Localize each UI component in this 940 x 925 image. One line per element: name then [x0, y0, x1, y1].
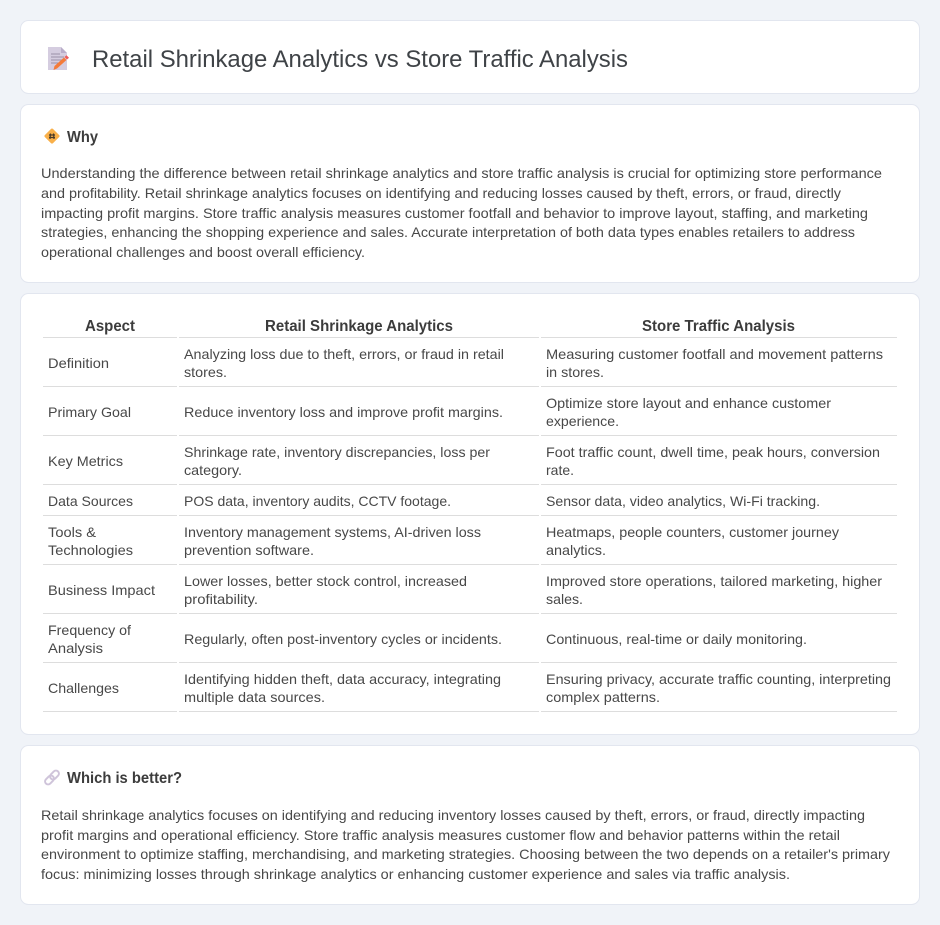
icon: chain link	[44, 769, 60, 786]
table row: primary goal: Primary Goal	[48, 404, 131, 420]
text block: why paragraph: and profitability. Retail shrinkage analytics focuses on identifying and reducing losses caused by theft, errors, or fraud, directly	[41, 185, 841, 201]
table row: frequency of analysis	[43, 622, 897, 663]
table header row: Aspect	[85, 318, 136, 335]
table row: tools and technologies: Technologies	[48, 542, 133, 558]
table header row: Store Traffic Analysis	[642, 318, 795, 335]
table row: tools and technologies: analytics.	[546, 542, 606, 558]
heading: why: Why	[67, 129, 98, 146]
text block: which is better paragraph: Retail shrinkage analytics focuses on identifying and reducing inventory losses caused by theft, errors, or fraud, directly impacting	[41, 807, 865, 823]
table row: challenges: Challenges	[48, 680, 119, 696]
table row: business impact: profitability.	[184, 591, 258, 607]
table row: business impact	[43, 573, 897, 614]
table row: key metrics: rate.	[546, 462, 574, 478]
table row: tools and technologies	[43, 524, 897, 565]
table row: data sources: Data Sources	[48, 493, 133, 509]
table row: primary goal: Optimize store layout and enhance customer	[546, 395, 831, 411]
table row: primary goal: Reduce inventory loss and improve profit margins.	[184, 404, 503, 420]
table row: tools and technologies: Heatmaps, people counters, customer journey	[546, 524, 839, 540]
table row: data sources	[43, 493, 897, 516]
table row: key metrics: Shrinkage rate, inventory discrepancies, loss per	[184, 444, 490, 460]
table row: key metrics: category.	[184, 462, 242, 478]
text block: why paragraph: strategies, enhancing the shopping experience and sales. Accurate interpretation of both data types enables retailers to address	[41, 224, 855, 240]
table row: data sources: Sensor data, video analytics, Wi-Fi tracking.	[546, 493, 820, 509]
panel: comparison table	[20, 294, 920, 734]
panel: why	[20, 104, 920, 282]
table row: business impact: Lower losses, better stock control, increased	[184, 573, 467, 589]
text block: why paragraph	[41, 165, 882, 260]
table row: definition	[43, 346, 897, 387]
icon: document with pencil	[48, 47, 69, 70]
table header row	[43, 318, 897, 338]
table row: tools and technologies: Inventory management systems, AI-driven loss	[184, 524, 481, 540]
table row: key metrics: Key Metrics	[48, 453, 123, 469]
table row: business impact: sales.	[546, 591, 583, 607]
table row: definition: Measuring customer footfall and movement patterns	[546, 346, 883, 362]
text block: which is better paragraph: profit margins and operational efficiency. Store traffic analysis measures customer flow and behavior patterns within the retail	[41, 827, 840, 843]
table row: definition: Definition	[48, 355, 109, 371]
table row: tools and technologies: prevention software.	[184, 542, 314, 558]
table row: challenges	[43, 671, 897, 712]
table row: challenges: complex patterns.	[546, 689, 660, 705]
table row: business impact: Business Impact	[48, 582, 155, 598]
table row: definition: stores.	[184, 364, 227, 380]
table row: challenges: Ensuring privacy, accurate traffic counting, interpreting	[546, 671, 891, 687]
table row: primary goal	[43, 395, 897, 436]
table header row: Retail Shrinkage Analytics	[265, 318, 453, 335]
text block: why paragraph: Understanding the difference between retail shrinkage analytics and store traffic analysis is crucial for optimizing store performance	[41, 165, 882, 181]
table row: challenges: multiple data sources.	[184, 689, 325, 705]
table row: frequency of analysis: Frequency of	[48, 622, 131, 638]
table row: challenges: Identifying hidden theft, data accuracy, integrating	[184, 671, 501, 687]
table row: key metrics	[43, 444, 897, 485]
text block: why paragraph: operational challenges and boost overall efficiency.	[41, 244, 365, 260]
table row: key metrics: Foot traffic count, dwell time, peak hours, conversion	[546, 444, 880, 460]
table row: frequency of analysis: Analysis	[48, 640, 103, 656]
table row: frequency of analysis: Continuous, real-time or daily monitoring.	[546, 631, 807, 647]
text block: which is better paragraph	[41, 807, 890, 882]
table row: frequency of analysis: Regularly, often post-inventory cycles or incidents.	[184, 631, 502, 647]
icon: warning diamond	[44, 128, 60, 144]
table row: definition: in stores.	[546, 364, 604, 380]
table row: definition: Analyzing loss due to theft, errors, or fraud in retail	[184, 346, 504, 362]
panel: which is better	[20, 746, 920, 904]
table row: business impact: Improved store operations, tailored marketing, higher	[546, 573, 882, 589]
heading: which is better: Which is better?	[67, 770, 182, 787]
panel: header	[20, 20, 920, 94]
text block: which is better paragraph: focus: minimizing losses through shrinkage analytics or enhancing customer experience and sales via traffic analysis.	[41, 866, 790, 882]
table row: data sources: POS data, inventory audits, CCTV footage.	[184, 493, 451, 509]
table row: primary goal: experience.	[546, 413, 619, 429]
text block: why paragraph: impacting profit margins. Store traffic analysis measures customer footfall and behavior to improve layout, staffing, and marketing	[41, 205, 868, 221]
title: Retail Shrinkage Analytics vs Store Traffic Analysis	[92, 46, 628, 73]
text block: which is better paragraph: environment to optimize staffing, merchandising, and marketing strategies. Choosing between the two depends on a retailer's primary	[41, 846, 890, 862]
table row: tools and technologies: Tools &	[48, 524, 97, 540]
